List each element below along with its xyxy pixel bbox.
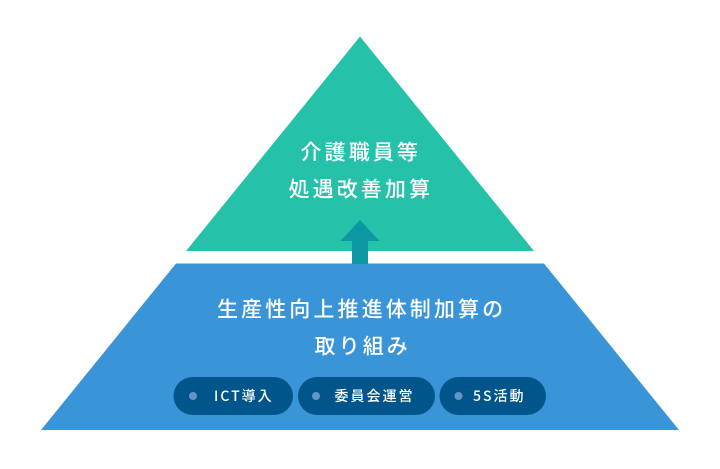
heading: lower trapezoid text: 取り組み bbox=[314, 330, 411, 360]
pill: 5S活動 bbox=[440, 377, 546, 415]
arrow: upward bbox=[340, 220, 380, 264]
panel: lower blue trapezoid bbox=[41, 264, 679, 430]
heading: upper triangle text: 処遇改善加算 bbox=[288, 174, 433, 204]
heading: upper triangle text bbox=[288, 136, 433, 204]
heading: lower trapezoid text: 生産性向上推進体制加算の bbox=[217, 294, 506, 324]
pill: ICT導入 bbox=[174, 377, 293, 415]
panel: upper green triangle bbox=[186, 36, 534, 251]
heading: upper triangle text: 介護職員等 bbox=[300, 136, 421, 166]
pill: 委員会運営 bbox=[298, 377, 435, 415]
pill: ICT導入: ICT導入 bbox=[214, 386, 274, 406]
pill: 委員会運営: 委員会運営 bbox=[334, 386, 414, 406]
heading: lower trapezoid text bbox=[217, 294, 506, 360]
pill: 5S活動: 5S活動 bbox=[473, 386, 526, 406]
